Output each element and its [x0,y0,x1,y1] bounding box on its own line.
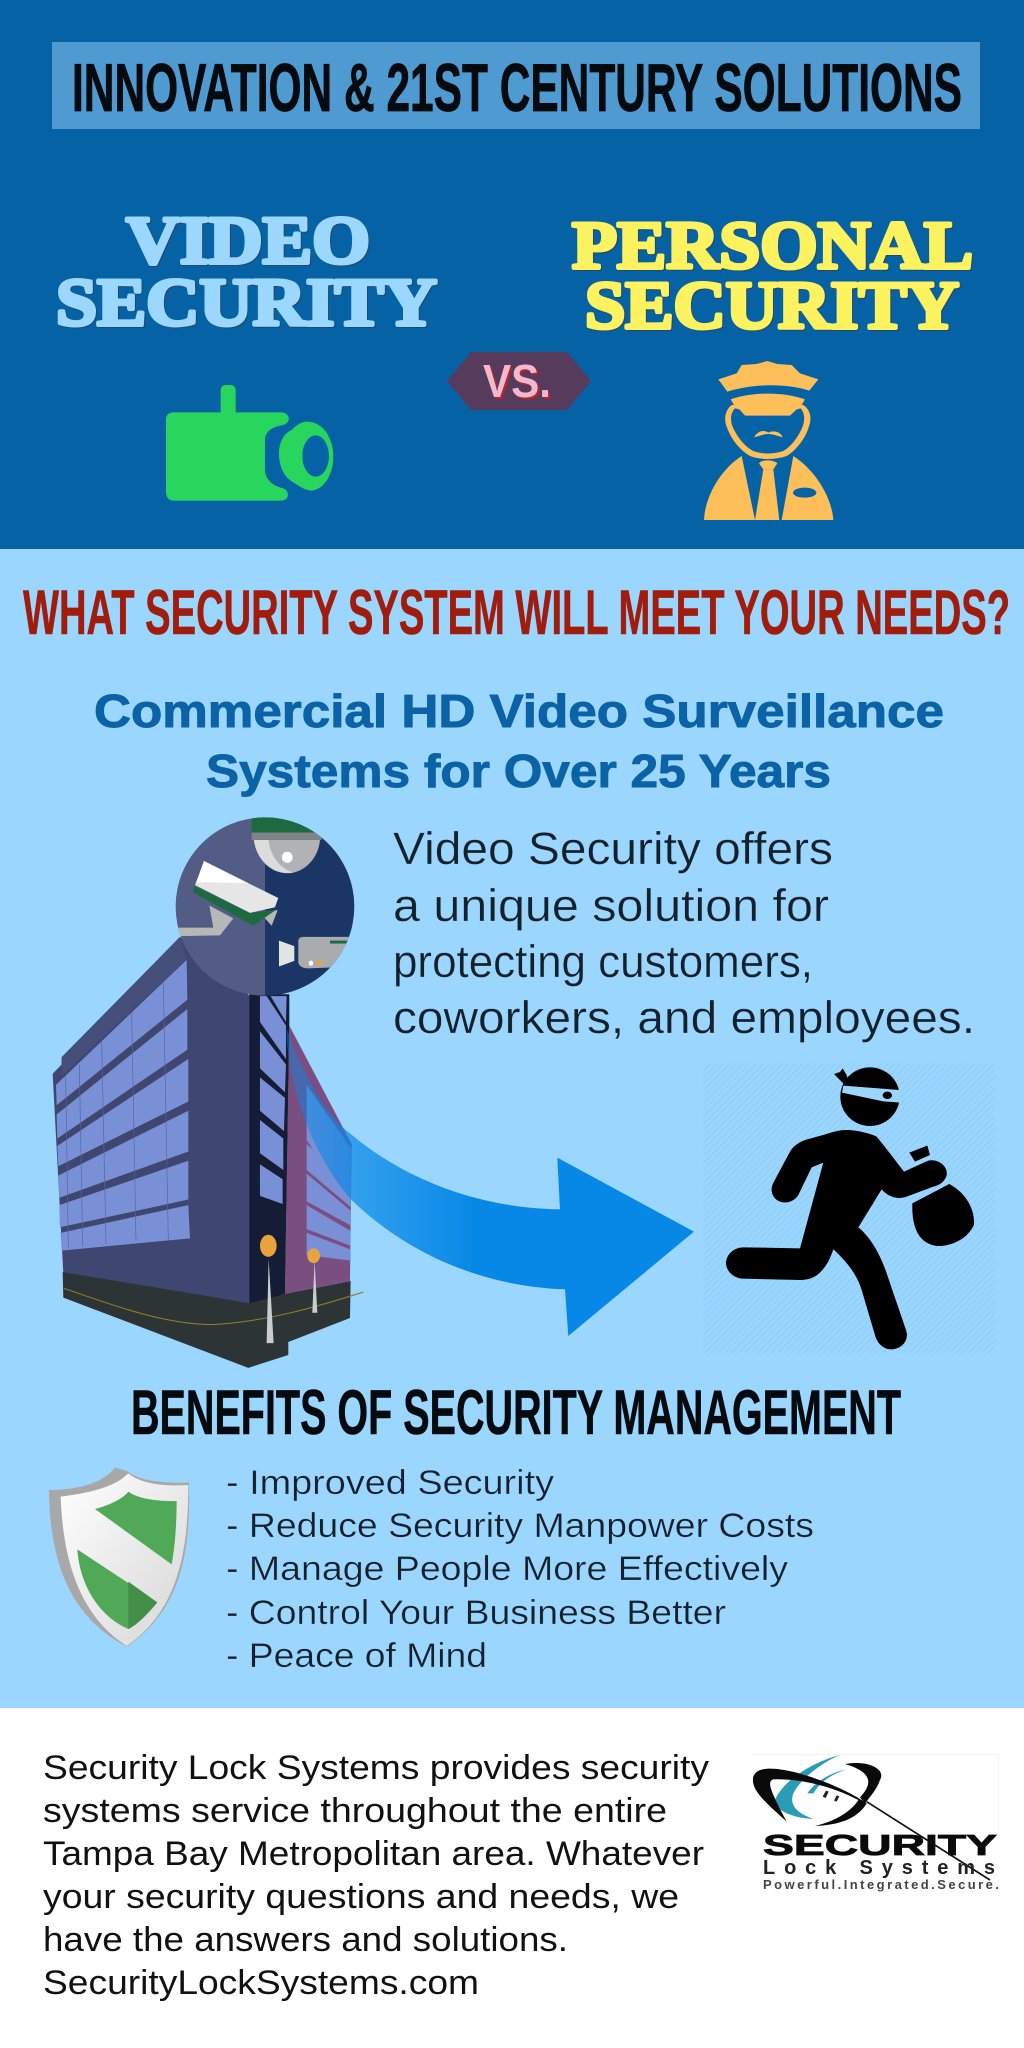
text block: company description: systems service throughout the entire [43,1792,667,1830]
list: benefits: - Reduce Security Manpower Costs [226,1507,814,1545]
illustration: surveillance cameras circle [173,815,357,1000]
logo: security lock systems [752,1754,999,1892]
list: benefits: - Manage People More Effectively [226,1550,788,1588]
heading: video security: SECURITY [56,264,437,340]
text block: video security description: coworkers, and employees. [393,992,975,1043]
heading: personal security: SECURITY [585,267,959,343]
list: benefits [226,1464,814,1675]
logo: security lock systems: Lock Systems [763,1857,995,1879]
versus badge: VS. [485,357,553,409]
text block: video security description: a unique solution for [393,880,829,931]
icon: security guard [704,361,833,520]
logo: security lock systems: Powerful.Integrated.Secure. [763,1877,999,1892]
text block: video security description: protecting customers, [393,936,813,987]
text block: company description: SecurityLockSystems.com [43,1964,479,2002]
panel: security needs [0,549,1024,1708]
list: benefits: - Improved Security [226,1464,554,1502]
text block: video security description [393,823,975,1043]
illustration: office building [53,937,363,1368]
versus badge [447,352,591,410]
heading: personal security [572,207,973,343]
arrow: building to thief [287,1028,694,1336]
subheading: commercial surveillance [94,685,944,797]
text block: video security description: Video Security offers [393,823,833,874]
heading: video security [56,202,437,340]
subheading: commercial surveillance: Systems for Over 25 Years [206,745,831,797]
versus badge: VS. [483,355,551,407]
text block: company description: your security questions and needs, we [43,1878,679,1916]
logo: security lock systems: SECURITY [763,1830,997,1862]
panel: footer [0,1708,1024,2048]
illustration: running thief [703,1063,995,1353]
list: benefits: - Peace of Mind [226,1637,487,1675]
icon: video camera [166,385,333,501]
subheading: commercial surveillance: Commercial HD Video Surveillance [94,685,944,737]
text block: company description [43,1749,709,2002]
text block: company description: Tampa Bay Metropolitan area. Whatever [43,1835,704,1873]
list: benefits: - Control Your Business Better [226,1594,726,1632]
text block: company description: have the answers and solutions. [43,1921,568,1959]
heading: video security: VIDEO [126,202,370,278]
icon: shield [49,1467,189,1647]
panel: header [0,0,1024,549]
heading: personal security: PERSONAL [572,207,973,283]
text block: company description: Security Lock Systems provides security [43,1749,709,1787]
